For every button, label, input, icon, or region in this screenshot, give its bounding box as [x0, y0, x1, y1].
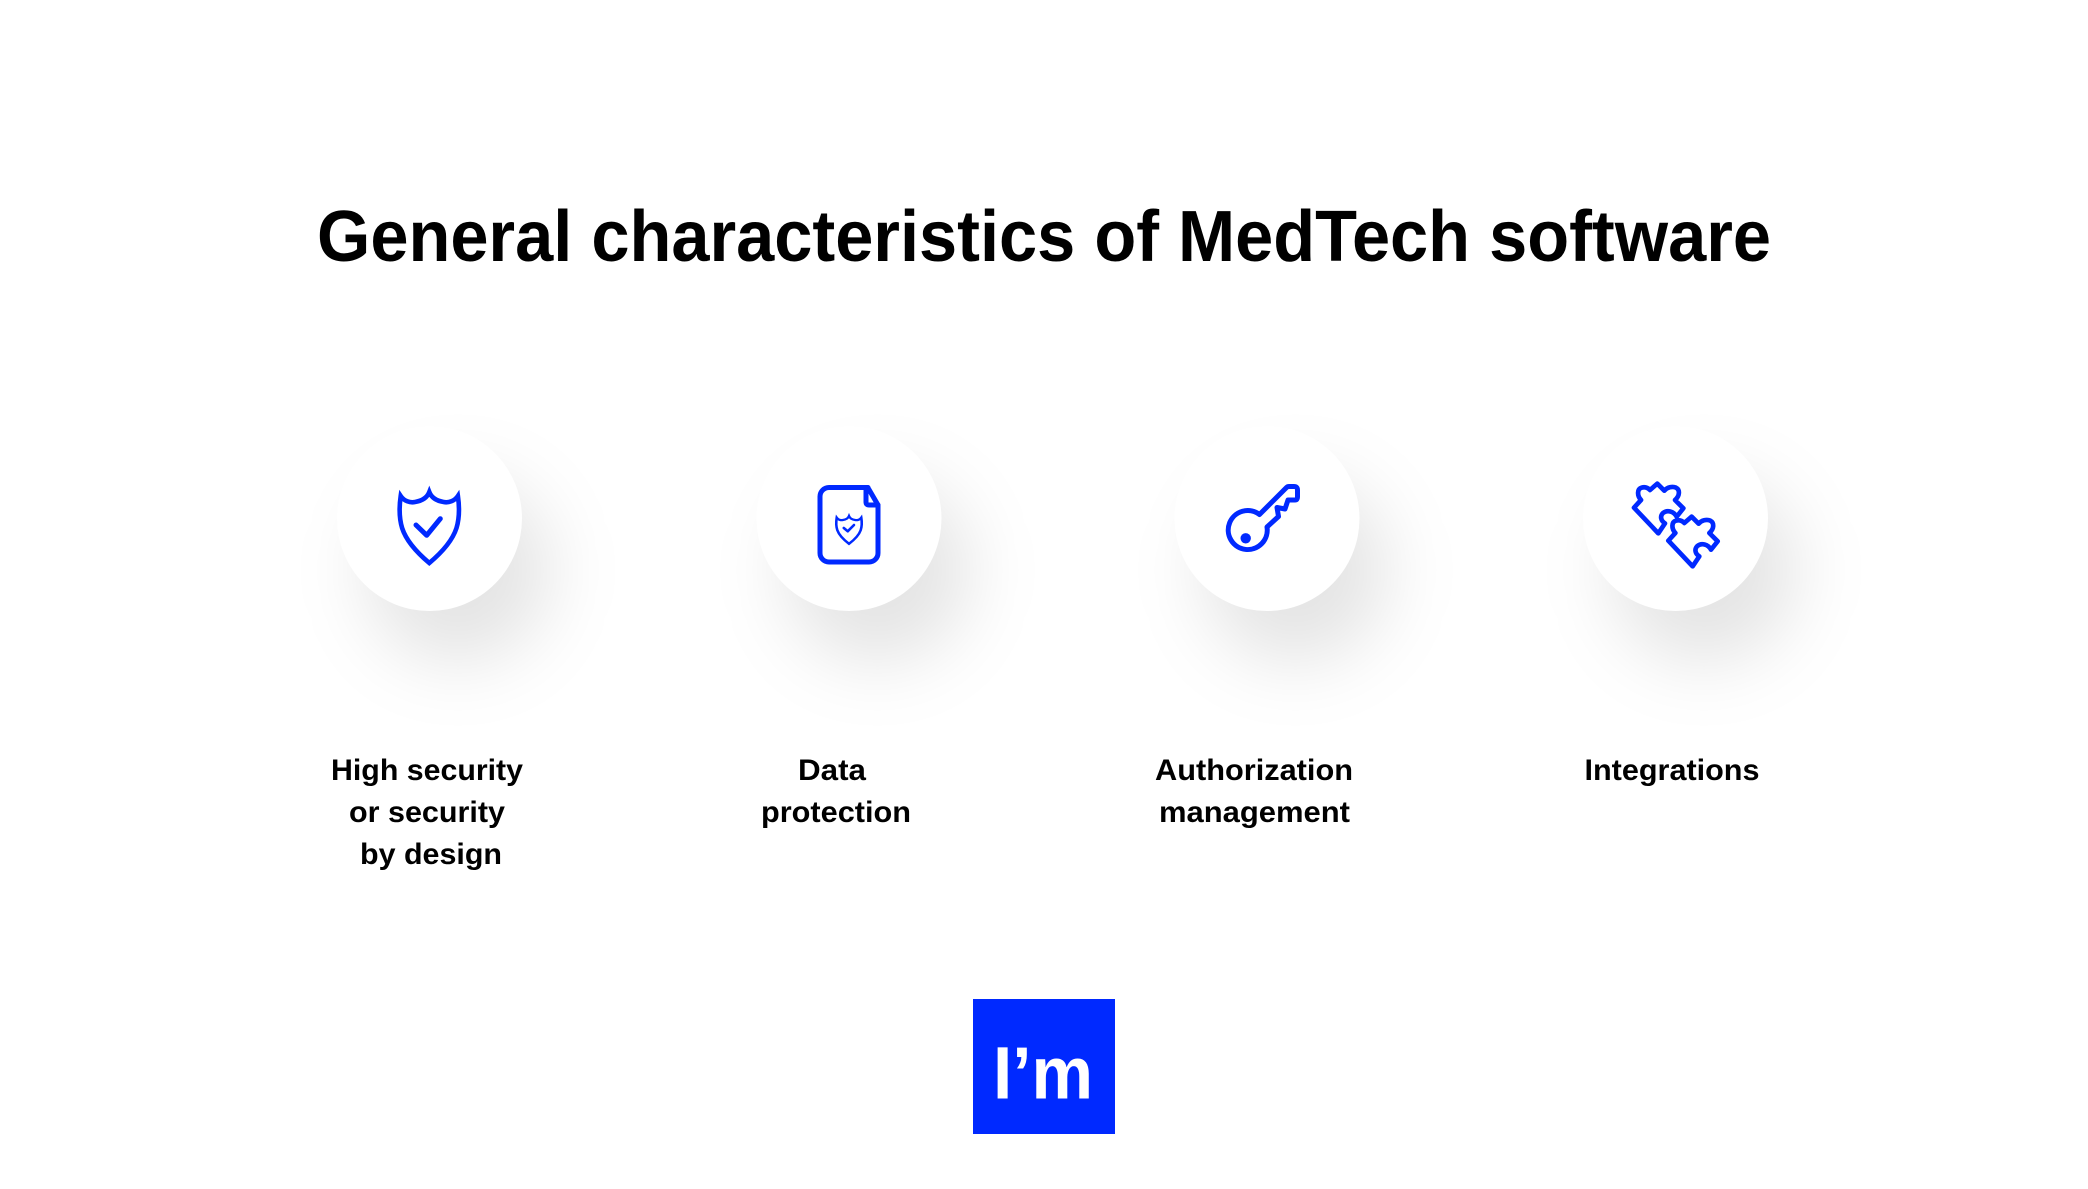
panel: authorization management	[1155, 426, 1388, 829]
label: data protection: protection	[761, 796, 911, 829]
logo	[973, 999, 1115, 1134]
circle shadow: integrations	[1612, 478, 1796, 662]
label: data protection	[761, 754, 911, 829]
icon: shield with check mark	[400, 492, 459, 563]
icon circle: integrations	[1583, 426, 1768, 611]
label: high security: High security	[331, 754, 523, 787]
icon: puzzle pieces	[1634, 484, 1718, 566]
label: high security	[331, 754, 523, 871]
icon circle: high security	[337, 426, 522, 611]
label: authorization management: management	[1159, 796, 1350, 829]
logo: I’m	[993, 1032, 1093, 1114]
panel: high security	[331, 426, 550, 871]
panel: integrations	[1583, 426, 1796, 787]
circle shadow: data protection	[785, 478, 970, 662]
label: data protection: Data	[798, 754, 866, 787]
circle shadow: high security	[366, 478, 550, 662]
circle shadow: authorization management	[1203, 478, 1388, 662]
icon circle: data protection	[756, 426, 942, 611]
label: high security: or security	[349, 796, 505, 829]
label: authorization management: Authorization	[1155, 754, 1353, 787]
title: General characteristics of MedTech software	[317, 197, 1771, 277]
panel: data protection	[756, 426, 970, 829]
icon circle: authorization management	[1174, 426, 1360, 611]
label: authorization management	[1155, 754, 1353, 829]
icon: key	[1228, 486, 1298, 550]
label: integrations: Integrations	[1584, 754, 1760, 787]
label: high security: by design	[360, 838, 502, 871]
icon: document with shield	[820, 488, 878, 562]
